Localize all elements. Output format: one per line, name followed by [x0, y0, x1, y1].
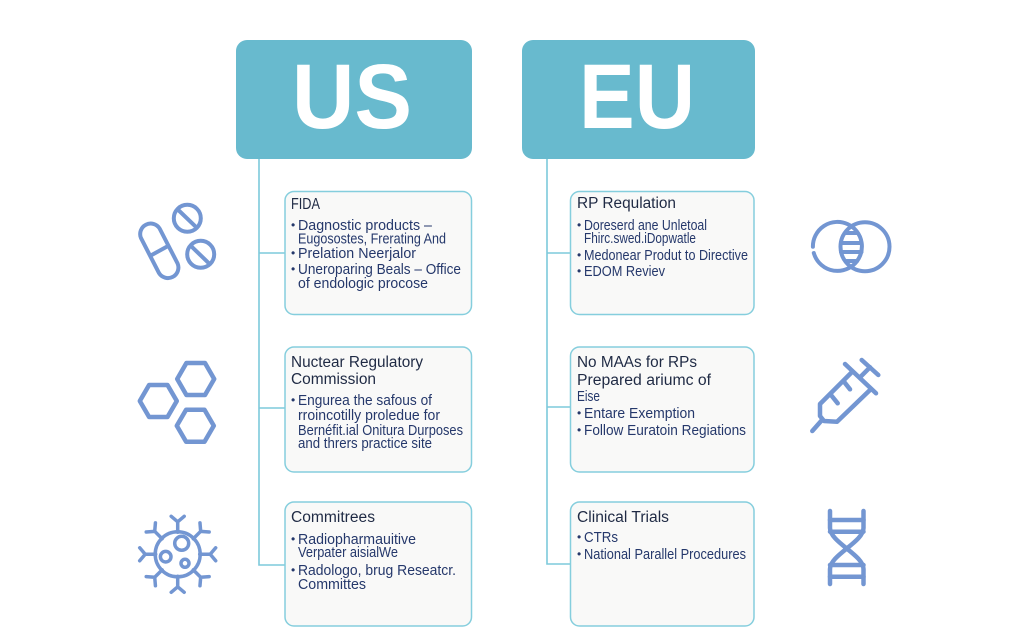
- panel: RP Regulation: [570, 192, 754, 314]
- heading: No MAAs for RPs: Eise: [577, 389, 600, 405]
- text block: RP regulation bullets: [577, 218, 748, 280]
- text block: RP regulation bullets: EDOM Reviev: [584, 264, 666, 280]
- text block: FDA bullets: of endologic procose: [298, 276, 428, 292]
- text block: committees bullets: Verpater aisialWe: [298, 545, 398, 561]
- text block: committees bullets: Radiopharmauitive: [298, 532, 416, 548]
- text block: FDA bullets: Dagnostic products –: [298, 218, 433, 234]
- heading: No MAAs for RPs: [577, 354, 712, 405]
- text block: RP regulation bullets: •: [577, 248, 581, 262]
- icon: DNA helix: [830, 511, 864, 584]
- text block: RP regulation bullets: Doreserd ane Unletoal: [584, 218, 707, 234]
- text block: committees bullets: Committes: [298, 577, 366, 593]
- text block: clinical trials bullets: National Parallel Procedures: [584, 547, 746, 563]
- icon: virus cell: [140, 516, 216, 592]
- panel: Committees: [285, 502, 472, 626]
- header: EU: [522, 40, 755, 159]
- text block: MAA bullets: [577, 406, 746, 439]
- text block: FDA bullets: •: [291, 246, 295, 260]
- text block: RP regulation bullets: Medonear Produt to Directive: [584, 248, 748, 264]
- text block: FDA bullets: Prelation Neerjalor: [298, 246, 416, 262]
- heading: Clinical Trials: Clinical Trials: [577, 509, 669, 526]
- heading: RP Regulation: RP Requlation: [577, 195, 676, 212]
- heading: No MAAs for RPs: Prepared ariumc of: [577, 372, 712, 389]
- heading: Nuclear Regulatory Commission: Nuctear Regulatory: [291, 354, 423, 371]
- heading: FDA: FIDA: [291, 196, 321, 213]
- text block: MAA bullets: •: [577, 423, 581, 437]
- heading: Committees: Commitrees: [291, 509, 375, 526]
- text block: commission bullets: •: [291, 393, 295, 407]
- text block: commission bullets: [291, 393, 463, 452]
- text block: committees bullets: •: [291, 532, 295, 546]
- text block: FDA bullets: Uneroparing Beals – Office: [298, 262, 461, 278]
- text block: committees bullets: Radologo, brug Reseatcr.: [298, 563, 456, 579]
- text block: clinical trials bullets: •: [577, 530, 581, 544]
- text block: committees bullets: [291, 532, 456, 593]
- icon: pills: [140, 205, 214, 278]
- text block: FDA bullets: •: [291, 218, 295, 232]
- panel: Nuclear Regulatory Commission: [285, 347, 472, 472]
- panel: No MAAs for RPs: [570, 347, 754, 472]
- icon: syringe: [812, 360, 878, 431]
- text block: RP regulation bullets: •: [577, 218, 581, 232]
- text block: clinical trials bullets: [577, 530, 746, 563]
- text block: committees bullets: •: [291, 563, 295, 577]
- text block: FDA bullets: •: [291, 262, 295, 276]
- text block: clinical trials bullets: CTRs: [584, 530, 618, 546]
- panel: FDA: [285, 192, 472, 314]
- panel: Clinical Trials: [570, 502, 754, 626]
- header: US: [236, 40, 472, 159]
- heading: Nuclear Regulatory Commission: [291, 354, 423, 388]
- text block: commission bullets: and thrers practice site: [298, 436, 432, 452]
- heading: No MAAs for RPs: No MAAs for RPs: [577, 354, 697, 371]
- header: EU: EU: [579, 46, 695, 148]
- text block: commission bullets: Engurea the safous of: [298, 393, 433, 409]
- text block: commission bullets: Bernéfit.ial Onitura Durposes: [298, 423, 463, 439]
- icon: overlapping circles with helix: [813, 222, 890, 271]
- text block: MAA bullets: •: [577, 406, 581, 420]
- text block: MAA bullets: Entare Exemption: [584, 406, 695, 422]
- heading: Nuclear Regulatory Commission: Commission: [291, 371, 376, 388]
- connector tree: EU: [547, 159, 570, 564]
- text block: FDA bullets: [291, 218, 461, 292]
- text block: MAA bullets: Follow Euratoin Regiations: [584, 423, 746, 439]
- text block: RP regulation bullets: •: [577, 264, 581, 278]
- connector tree: US: [259, 159, 285, 565]
- icon: hexagons: [140, 363, 214, 442]
- text block: RP regulation bullets: Fhirc.swed.iDopwatle: [584, 231, 696, 247]
- text block: FDA bullets: Eugosostes, Frerating And: [298, 232, 446, 248]
- text block: commission bullets: rroincotilly proledue for: [298, 408, 440, 424]
- text block: clinical trials bullets: •: [577, 547, 581, 561]
- header: US: US: [292, 46, 412, 148]
